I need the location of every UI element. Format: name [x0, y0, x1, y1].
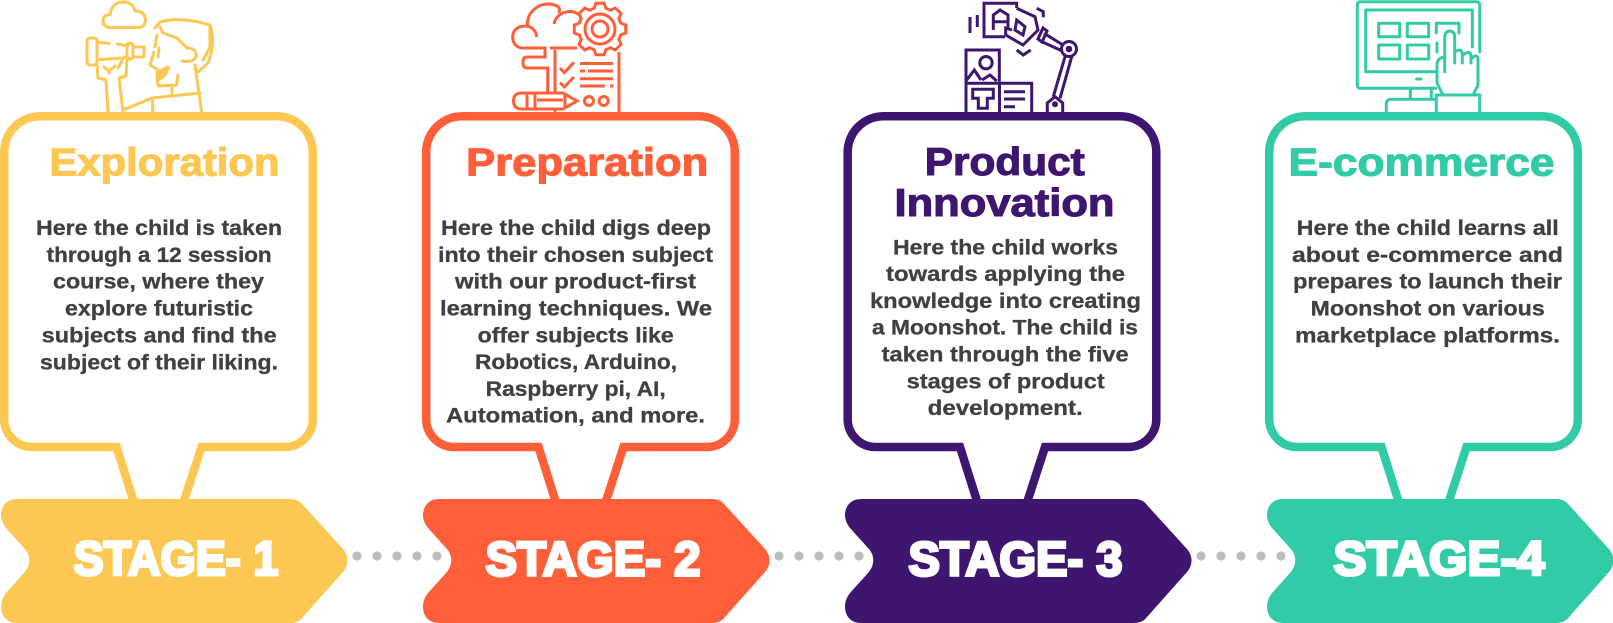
banner arrow: stage 4	[1267, 499, 1613, 623]
text block: exploration description: explore futuristic	[65, 298, 253, 321]
text block: e-commerce description: marketplace platforms.	[1295, 324, 1560, 347]
panel: stage 4 e-commerce	[1267, 2, 1613, 623]
text block: exploration description	[36, 217, 282, 374]
heading: Preparation: Preparation	[466, 142, 708, 185]
panel: stage 2 preparation	[423, 3, 770, 623]
text block: e-commerce description: about e-commerce and	[1292, 244, 1563, 267]
text block: product innovation description: taken through the five	[882, 344, 1129, 366]
text block: product innovation description: stages of product	[907, 370, 1105, 393]
text block: product innovation description: towards applying the	[886, 263, 1125, 286]
heading: Product Innovation: Innovation	[894, 182, 1114, 225]
text block: exploration description: Here the child is taken	[36, 217, 282, 240]
text block: e-commerce description: Moonshot on various	[1311, 298, 1545, 321]
speech box: product innovation	[848, 116, 1156, 501]
text block: exploration description: through a 12 session	[47, 244, 272, 267]
icon: cloud, gear, checklist and pencil	[513, 3, 626, 112]
banner label: stage 3: STAGE- 3	[908, 534, 1122, 586]
text block: exploration description: subjects and find the	[42, 324, 277, 347]
heading: Product Innovation: Product	[925, 141, 1085, 184]
text block: preparation description: Robotics, Arduino,	[475, 351, 677, 374]
text block: product innovation description	[870, 236, 1141, 420]
text block: preparation description: Here the child digs deep	[441, 217, 711, 240]
text block: preparation description: offer subjects like	[478, 324, 674, 347]
icon: person with binoculars	[87, 2, 213, 112]
connector dots: stage 1 to 2	[352, 551, 442, 561]
heading: Exploration: Exploration	[50, 142, 280, 185]
banner label: stage 1: STAGE- 1	[74, 533, 278, 586]
text block: product innovation description: knowledge into creating	[870, 290, 1141, 313]
text block: preparation description: learning techniques. We	[440, 297, 712, 320]
panel: stage 3 product innovation	[845, 3, 1192, 623]
text block: preparation description	[438, 217, 713, 428]
speech box: e-commerce	[1269, 116, 1578, 501]
text block: preparation description: into their chosen subject	[438, 244, 713, 267]
text block: e-commerce description: Here the child learns all	[1297, 217, 1559, 240]
text block: preparation description: Automation, and more.	[446, 405, 705, 428]
speech box: preparation	[426, 116, 735, 501]
text block: e-commerce description	[1292, 217, 1563, 347]
banner arrow: stage 2	[423, 499, 770, 623]
text block: e-commerce description: prepares to launch their	[1293, 271, 1562, 294]
text block: preparation description: with our product-first	[454, 271, 696, 294]
speech box: exploration	[4, 116, 313, 501]
text block: product innovation description: Here the child works	[893, 236, 1118, 259]
heading: Product Innovation	[894, 141, 1114, 225]
text block: preparation description: Raspberry pi, AI,	[486, 378, 666, 401]
banner label: stage 2: STAGE- 2	[486, 534, 700, 586]
text block: product innovation description: development.	[928, 397, 1083, 420]
icon: robot arm with design blocks	[966, 3, 1076, 112]
banner arrow: stage 1	[1, 499, 348, 623]
banner arrow: stage 3	[845, 499, 1192, 623]
panel: stage 1 exploration	[1, 2, 348, 623]
connector dots: stage 3 to 4	[1196, 551, 1286, 561]
text block: product innovation description: a Moonshot. The child is	[872, 317, 1138, 340]
banner label: stage 4: STAGE-4	[1334, 533, 1545, 586]
text block: exploration description: subject of their liking.	[40, 351, 278, 374]
icon: touch screen monitor with hand	[1357, 2, 1480, 112]
connector dots: stage 2 to 3	[774, 551, 864, 561]
heading: E-commerce: E-commerce	[1288, 142, 1554, 185]
text block: exploration description: course, where they	[53, 271, 264, 294]
